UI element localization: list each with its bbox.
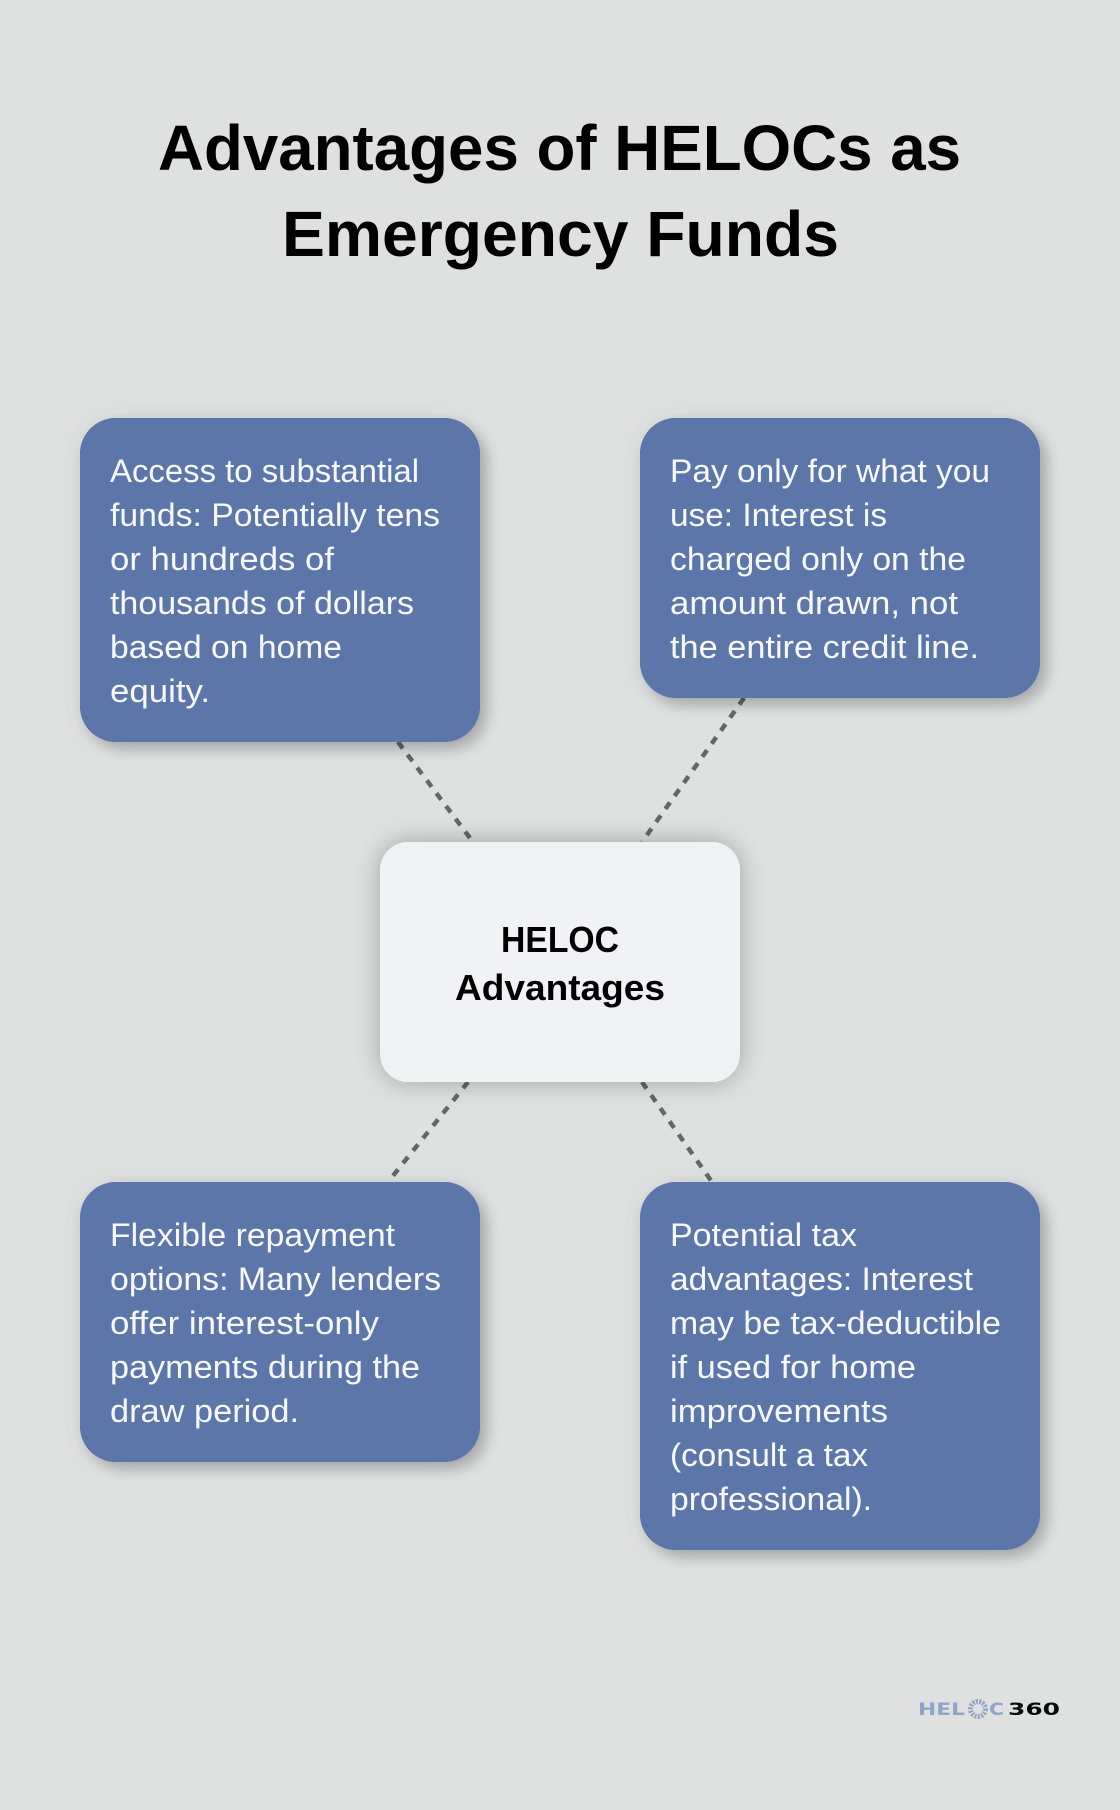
panel: potential tax advantages: improvements — [670, 1393, 888, 1429]
panel: pay only for what you use: Pay only for what you — [670, 453, 990, 489]
panel: potential tax advantages: if used for home — [670, 1349, 916, 1385]
panel: potential tax advantages: professional). — [670, 1481, 872, 1517]
connector: top right box to center — [642, 698, 744, 842]
panel: access to substantial funds: funds: Potentially tens — [110, 497, 440, 533]
connector: bottom right box to center — [642, 1082, 712, 1182]
connector: bottom left box to center — [388, 1082, 468, 1182]
panel: center HELOC advantages: Advantages — [455, 967, 665, 1008]
panel: flexible repayment options: options: Many lenders — [110, 1261, 441, 1297]
panel: center HELOC advantages — [380, 842, 740, 1082]
panel: pay only for what you use: amount drawn, not — [670, 585, 958, 621]
logo: HELOC360: C — [989, 1700, 1004, 1720]
logo: HELOC360: 360 — [1008, 1700, 1060, 1720]
panel: potential tax advantages: advantages: Interest — [670, 1261, 973, 1297]
logo: HELOC360 — [918, 1700, 1060, 1720]
panel: access to substantial funds — [80, 418, 480, 742]
panel: access to substantial funds: based on home — [110, 629, 342, 665]
panel: potential tax advantages: Potential tax — [670, 1217, 857, 1253]
panel: pay only for what you use: the entire credit line. — [670, 629, 979, 665]
panel: potential tax advantages: (consult a tax — [670, 1437, 868, 1473]
panel: access to substantial funds: or hundreds of — [110, 541, 334, 577]
title — [158, 112, 961, 270]
title: Emergency Funds — [282, 198, 839, 270]
panel: center HELOC advantages: HELOC — [501, 919, 619, 960]
logo: HELOC360: HEL — [918, 1700, 965, 1720]
panel: pay only for what you use: charged only on the — [670, 541, 966, 577]
panel: flexible repayment options: offer interest-only — [110, 1305, 379, 1341]
panel: access to substantial funds: thousands of dollars — [110, 585, 414, 621]
panel: potential tax advantages — [640, 1182, 1040, 1550]
panel: flexible repayment options — [80, 1182, 480, 1462]
panel: access to substantial funds: equity. — [110, 673, 210, 709]
panel: pay only for what you use: use: Interest is — [670, 497, 887, 533]
panel: flexible repayment options: Flexible repayment — [110, 1217, 395, 1253]
panel: access to substantial funds: Access to substantial — [110, 453, 419, 489]
panel: pay only for what you use — [640, 418, 1040, 698]
panel: flexible repayment options: draw period. — [110, 1393, 299, 1429]
panel: flexible repayment options: payments during the — [110, 1349, 420, 1385]
title: Advantages of HELOCs as — [158, 112, 961, 184]
connector: top left box to center — [398, 742, 473, 842]
panel: potential tax advantages: may be tax-deductible — [670, 1305, 1001, 1341]
